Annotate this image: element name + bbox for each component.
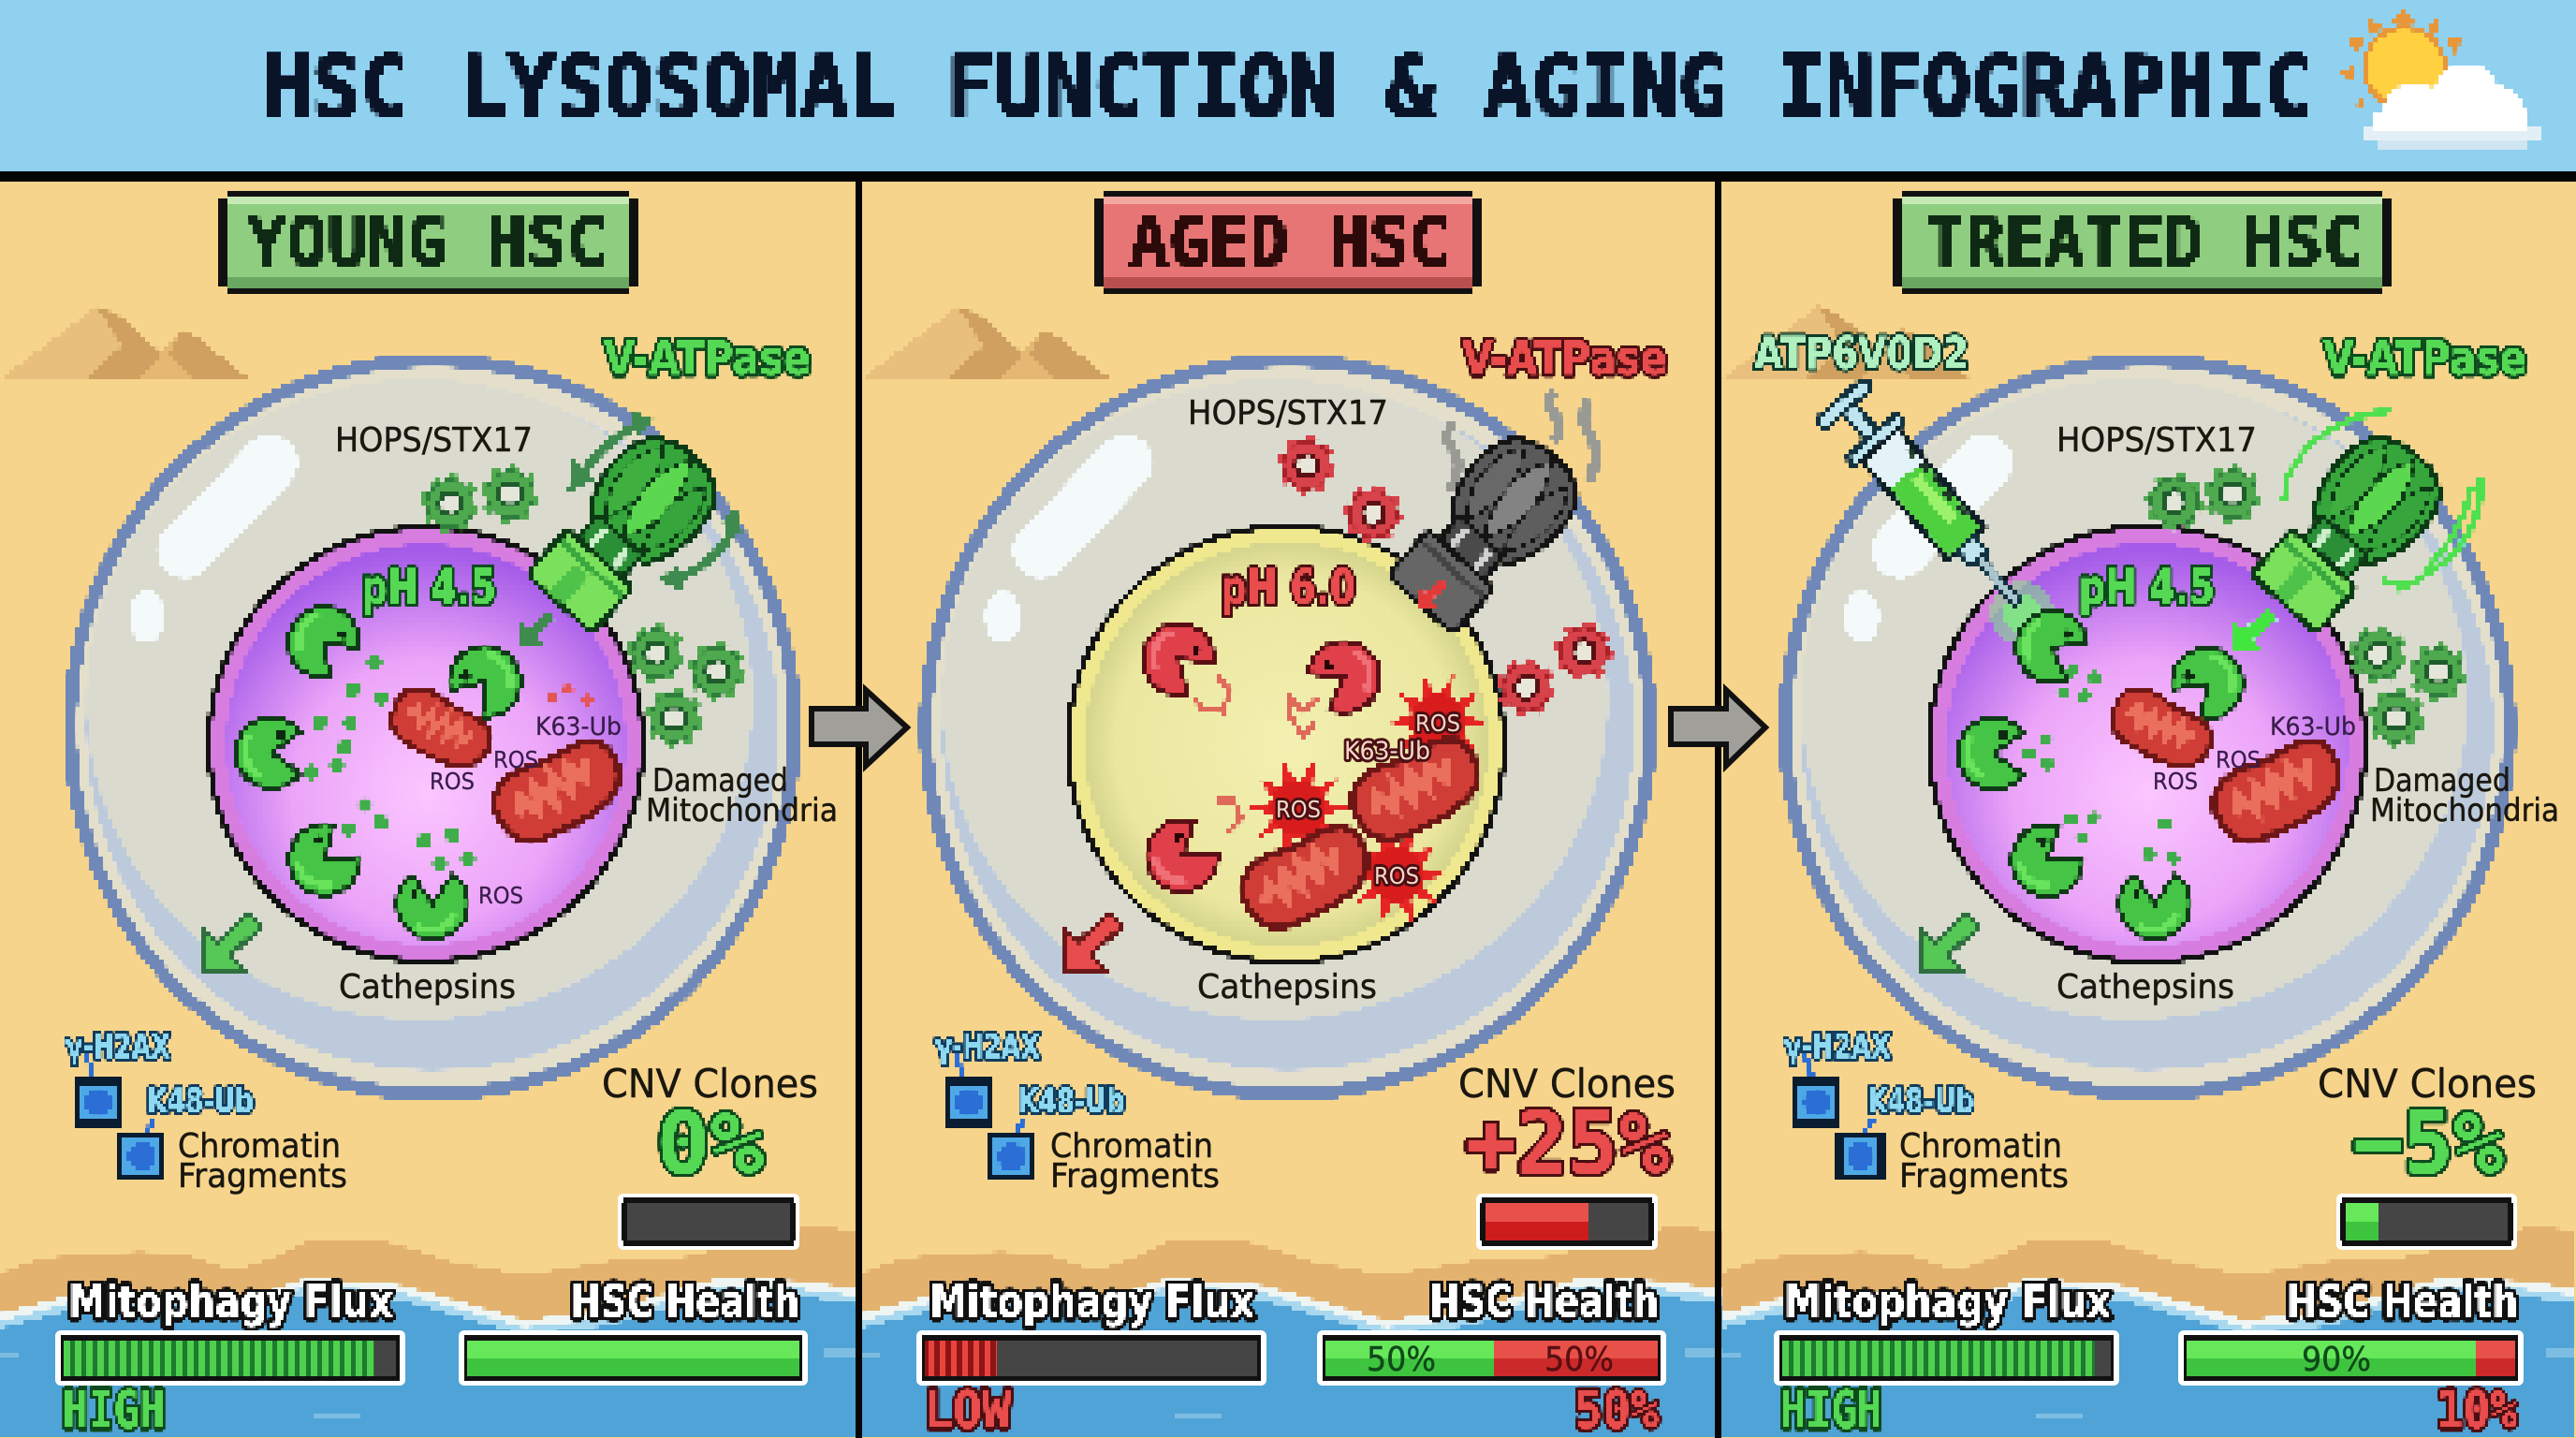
label: K63-Ub: K63-Ub: [2270, 712, 2356, 741]
label: HOPS/STX17: HOPS/STX17: [2056, 421, 2257, 460]
lysosome: [206, 524, 646, 964]
outer cell membrane: [64, 354, 801, 1101]
label: V-ATPase: V-ATPase: [604, 331, 811, 386]
icon: sun and cloud: [2340, 7, 2543, 150]
Mitophagy Flux bar: [916, 1330, 1266, 1386]
small red ROS dots: [547, 683, 593, 706]
CNV bar: [618, 1194, 799, 1250]
Mitophagy Flux bar: [55, 1330, 405, 1386]
autophagic pacmen: [1958, 598, 2258, 939]
outlined labels: treated: [1754, 328, 2526, 1438]
HOPS/STX17 gears: [427, 471, 534, 527]
damaged mitochondria gears: [633, 630, 740, 741]
outlined labels: aged: [924, 331, 1670, 1438]
label: Damaged Mitochondria: Mitochondria: [646, 792, 838, 829]
HSC Health bar: 90%: [2302, 1341, 2371, 1379]
panel: young HSC: [0, 181, 861, 1438]
damaged mitochondria gears: [2355, 631, 2462, 741]
label: ROS: ROS: [2153, 768, 2198, 795]
label: Chromatin Fragments: Fragments: [178, 1157, 347, 1196]
label: V-ATPase: V-ATPase: [2323, 331, 2526, 386]
label: HOPS/STX17: HOPS/STX17: [1188, 394, 1388, 433]
label: ROS: ROS: [493, 746, 538, 773]
label: Damaged Mitochondria: Mitochondria: [2370, 792, 2559, 829]
cell illustration: young: [64, 354, 801, 1181]
label: CNV Clones: CNV Clones: [1458, 1061, 1676, 1107]
label: gamma-H2AX: γ-H2AX: [935, 1028, 1040, 1066]
divider: panel 2 and 3: [1715, 182, 1721, 1438]
label: K48-Ub: K48-Ub: [1018, 1082, 1125, 1121]
chromatin fragment squares: [1793, 1054, 1884, 1181]
HSC Health bar: [459, 1330, 808, 1386]
smoke wisps: [1447, 391, 1596, 492]
arrow: young to aged: [812, 690, 907, 766]
label: ROS: ROS: [1276, 796, 1321, 823]
divider: panel 1 and 2: [856, 182, 862, 1438]
label: Chromatin Fragments: Chromatin: [1899, 1127, 2062, 1166]
label: HSC Health: HSC Health: [571, 1276, 799, 1328]
CNV bar: [2336, 1194, 2517, 1250]
label: V-ATPase: V-ATPase: [1462, 331, 1667, 386]
autophagic pacmen: [236, 592, 535, 939]
label: Mitophagy Flux: Mitophagy Flux: [68, 1276, 393, 1328]
proton arrow: [2232, 609, 2279, 651]
outer cell membrane: [919, 354, 1657, 1101]
outer cell membrane: [1778, 354, 2516, 1101]
label: K63-Ub: K63-Ub: [535, 712, 622, 741]
label: CNV Clones: CNV Clones: [2318, 1061, 2537, 1107]
treated panel background: [1721, 181, 2576, 1438]
young panel background: [0, 181, 861, 1438]
label: CNV Clones: CNV Clones: [602, 1061, 818, 1107]
injection glow: [1990, 581, 2054, 645]
V-ATPase pump, failing: [1381, 421, 1593, 640]
label: K63-Ub: K63-Ub: [1344, 737, 1430, 766]
label: Cathepsins: Cathepsins: [339, 968, 516, 1006]
small red arrow on pump: [1416, 580, 1448, 608]
aged panel background: [861, 181, 1722, 1438]
title: HSC LYSOSOMAL FUNCTION & AGING INFOGRAPHIC: [263, 38, 2313, 137]
stat: CNV 0%: 0%: [656, 1093, 764, 1194]
cell illustration: treated: [1778, 354, 2516, 1181]
badge: Young HSC: YOUNG HSC: [247, 202, 607, 283]
header divider: [0, 171, 2576, 182]
label: Chromatin Fragments: Chromatin: [1050, 1127, 1213, 1166]
mitochondria: [383, 682, 634, 859]
stat: CNV -5%: −5%: [2352, 1093, 2504, 1194]
label: ATP6V0D2: ATP6V0D2: [1754, 328, 1969, 380]
outlined labels: young: [63, 331, 811, 1438]
label: ROS: ROS: [1374, 862, 1419, 889]
proton arrow: [520, 610, 556, 645]
spin motion lines: [2284, 410, 2481, 590]
label: ROS: ROS: [2216, 746, 2261, 773]
badge: Aged HSC: AGED HSC: [1129, 202, 1449, 283]
arrow: aged to treated: [1671, 690, 1765, 766]
label: Chromatin Fragments: Fragments: [1899, 1157, 2069, 1196]
label: gamma-H2AX: γ-H2AX: [1784, 1028, 1891, 1066]
header band: [0, 0, 2576, 172]
label: Damaged Mitochondria: Damaged: [2374, 762, 2510, 800]
damaged mitochondria gears: [1503, 628, 1607, 711]
label: HSC Health: HSC Health: [1429, 1276, 1659, 1328]
label: gamma-H2AX: γ-H2AX: [66, 1028, 170, 1066]
label: Damaged Mitochondria: Damaged: [652, 762, 788, 800]
label: Mitophagy Flux: Mitophagy Flux: [1784, 1276, 2111, 1328]
badge: Treated HSC: TREATED HSC: [1925, 202, 2363, 283]
mitochondria: [1230, 719, 1492, 946]
ROS bursts: [1247, 673, 1489, 923]
HOPS/STX17 gears: [1283, 442, 1397, 537]
CNV bar: [1476, 1194, 1658, 1250]
label: ROS: ROS: [478, 882, 523, 909]
mitochondria: [2103, 682, 2353, 859]
chromatin fragment squares: [944, 1054, 1035, 1181]
label: Cathepsins: Cathepsins: [1197, 968, 1377, 1006]
Mitophagy Flux bar: [1774, 1330, 2119, 1386]
label: K48-Ub: K48-Ub: [1867, 1082, 1974, 1121]
lysosome: [1065, 523, 1507, 965]
lysosome: [1926, 523, 2368, 965]
digested fragments: [304, 654, 476, 870]
badge: Young HSC: [218, 191, 638, 294]
chromatin fragment squares: [75, 1054, 166, 1181]
syringe: [1815, 376, 2043, 625]
HSC Health bar: [1317, 1330, 1666, 1386]
HSC Health bar: [2178, 1330, 2524, 1386]
label: K48-Ub: K48-Ub: [147, 1082, 254, 1121]
label: ROS: ROS: [430, 768, 475, 795]
badge: Aged HSC: [1094, 191, 1482, 294]
HOPS/STX17 gears: [2151, 471, 2256, 525]
exit arrow: [1922, 914, 1980, 970]
rotation arrows: [567, 412, 743, 592]
exit arrow: [204, 914, 262, 970]
HSC Health bar: 50%: [1544, 1341, 1614, 1379]
label: pH 4.5: pH 4.5: [2079, 560, 2215, 616]
digested fragments: [2022, 665, 2180, 865]
label: HOPS/STX17: HOPS/STX17: [335, 421, 533, 460]
label: Mitophagy Flux: Mitophagy Flux: [929, 1276, 1254, 1328]
panel: aged HSC: [861, 181, 1722, 1438]
label: Cathepsins: Cathepsins: [2056, 968, 2234, 1006]
V-ATPase pump: [2244, 420, 2456, 639]
panel: treated HSC: [1721, 181, 2576, 1438]
cell illustration: aged: [919, 354, 1657, 1181]
autophagic pacmen, inactive: [1128, 609, 1393, 905]
stat: CNV +25%: +25%: [1465, 1093, 1670, 1194]
V-ATPase pump: [520, 420, 732, 639]
HSC Health bar: 50%: [1367, 1341, 1436, 1379]
undigested fragments: [1193, 676, 1320, 832]
label: Chromatin Fragments: Fragments: [1050, 1157, 1220, 1196]
label: ROS: ROS: [1415, 710, 1460, 737]
label: pH 6.0: pH 6.0: [1221, 560, 1355, 616]
label: Chromatin Fragments: Chromatin: [178, 1127, 341, 1166]
exit arrow: [1064, 914, 1122, 970]
label: pH 4.5: pH 4.5: [361, 560, 496, 616]
label: HSC Health: HSC Health: [2287, 1276, 2518, 1328]
